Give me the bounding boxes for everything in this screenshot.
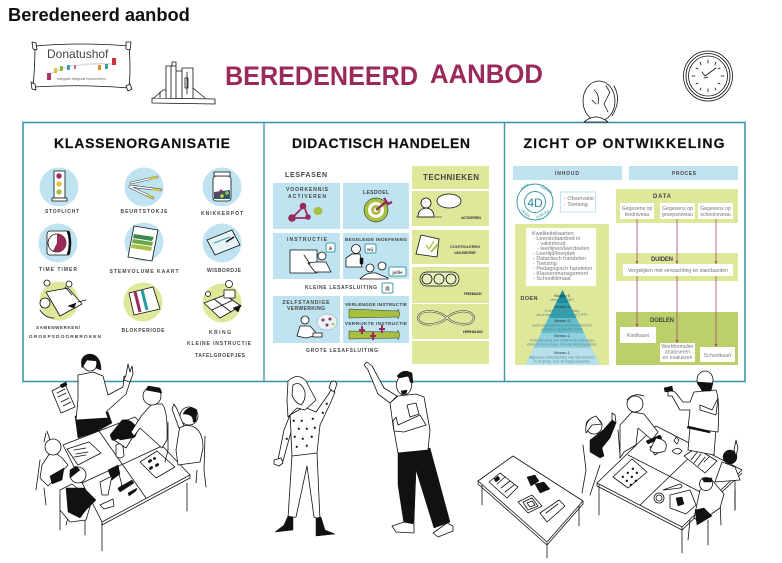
pyramid: kinderen in de groep, door de klasgroepsleider: [527, 342, 598, 346]
heading: lesfasen: LESFASEN: [285, 172, 327, 179]
card: controleren van begrip: VAN BEGRIP: [454, 250, 476, 255]
box: kwaliteitskaarten: - Schoolklimaat: [533, 276, 571, 282]
icon: spiral card: [518, 495, 542, 513]
icon: kring / tafelgroepjes: [202, 280, 242, 322]
block: doelen: Schoolkaart: [704, 353, 732, 359]
block: data: DATA: [653, 194, 672, 200]
pyramid: Extra ondersteuning met betrokkenheid: [532, 324, 592, 328]
block: data: Gegevens op: [700, 206, 731, 212]
card: feedback: [412, 267, 489, 303]
text: kleine lesafsluiting: KLEINE LESAFSLUITING: [305, 285, 377, 291]
label: GROEPSDOORBROKEN: [29, 334, 102, 340]
cell: voorkennis activeren: [273, 183, 340, 229]
cell: zelfstandige verwerking: ZELFSTANDIGE: [282, 300, 330, 306]
panel: zicht op ontwikkeling: [513, 135, 738, 365]
badge: 4D: 4D: [527, 196, 543, 210]
badge: jij: jij: [384, 286, 390, 292]
icon: stemvolume kaart: [124, 222, 164, 262]
cell: zelfstandige verwerking: VERWERKING: [287, 306, 325, 312]
block: duiden: Vergelijken met verwachting en standaarden: [628, 268, 728, 274]
card: herhaling: [412, 304, 489, 339]
label: SAMENWERKEN/: [36, 325, 81, 330]
badge: 4D: [517, 182, 554, 220]
pyramid: van intern begeleider (OPP): [541, 328, 583, 332]
label: STOPLICHT: [45, 209, 79, 215]
pyramid: Externe ondersteuning: [545, 309, 579, 313]
icon: beurtstokje: [124, 168, 164, 206]
pyramid: [525, 290, 600, 365]
box: kwaliteitskaarten: - Klassenmanagement: [533, 271, 589, 277]
cell: instructie: ik: [329, 246, 333, 251]
block: data: [616, 189, 738, 223]
pyramid: in de groep, door de klasgroepsleider: [534, 360, 591, 364]
table: [597, 426, 742, 553]
label: BEURTSTOKJE: [120, 209, 168, 215]
label: TAFELGROEPJES: [195, 353, 246, 359]
card: controleren van begrip: [412, 230, 489, 264]
block: data: Gegevens op: [662, 206, 693, 212]
panel: klassenorganisatie: [29, 135, 252, 359]
panel frame: [23, 122, 745, 382]
globe base over frame: [584, 117, 608, 122]
main title: [225, 59, 543, 91]
cell: instructie: [273, 233, 340, 279]
scene: teacher and group at table, left: [36, 354, 206, 551]
scene: side table with materials: [478, 456, 583, 558]
heading: klassenorganisatie: KLASSENORGANISATIE: [54, 135, 230, 151]
logo sign: Donatushof: [31, 42, 132, 91]
badge: 4D: DOEN: [520, 209, 531, 219]
card: activeren: [412, 191, 489, 226]
label: BLOKPERIODE: [122, 328, 165, 334]
main title: BEREDENEERD: [225, 61, 418, 91]
label: doen: DOEN: [520, 296, 538, 302]
cell: instructie: INSTRUCTIE: [287, 237, 328, 243]
main title: AANBOD: [430, 59, 543, 89]
heading: zicht op ontwikkeling: ZICHT OP ONTWIKKELING: [524, 135, 725, 151]
icon: samenwerken: [40, 280, 86, 320]
figure: child right: [172, 404, 206, 487]
cell: zelfstandige verwerking: [273, 296, 340, 343]
block: doelen: [616, 312, 738, 365]
cell: verlengde en verrijkte instructie: VERLENGDE INSTRUCTIE: [345, 302, 407, 307]
card: feedback: FEEDBACK: [464, 291, 482, 296]
icon: books on shelf: [152, 62, 215, 104]
box: kwaliteitskaarten: Kwaliteitskaarten:: [532, 231, 576, 237]
box: observatie toetsing: - Observatie: [564, 196, 594, 202]
header: technieken: TECHNIEKEN: [423, 173, 479, 182]
bar: inhoud: INHOUD: [555, 171, 579, 177]
card: activeren: ACTIVEREN: [461, 215, 481, 220]
cell: verlengde en verrijkte instructie: VERRIJKTE INSTRUCTIE: [345, 321, 407, 326]
cell: lesdoel: LESDOEL: [363, 190, 389, 196]
logo sign: Donatushof: Integrale Integraal Kindcentrum: [57, 77, 106, 81]
box: kwaliteitskaarten: - Toetsing: [533, 261, 557, 267]
figure: teacher: [52, 354, 133, 438]
box: kwaliteitskaarten: - vakinhoud: [537, 241, 565, 247]
box: kwaliteitskaarten: - leerlijnen/leerdoelen: [537, 246, 590, 252]
label: KNIKKERPOT: [201, 211, 243, 217]
bar: proces: [629, 166, 738, 180]
card: empty: [412, 341, 489, 364]
block: data: kindniveau: [625, 212, 650, 218]
block: doelen: analyseren: [665, 350, 690, 356]
label: WISBORDJE: [207, 268, 242, 274]
icon: black cards: [527, 475, 550, 493]
figure: child left bottom: [60, 466, 96, 535]
pyramid: Niveau 1: [554, 350, 571, 355]
figure: teacher with beard: [664, 371, 719, 455]
block: doelen: DOELEN: [650, 318, 674, 324]
pyramid: Ondersteuning voor individuele of groepjes: [530, 338, 595, 342]
icon: stoplicht: [40, 168, 78, 206]
box: observatie toetsing: [560, 192, 596, 212]
box: kwaliteitskaarten: - Pedagogisch handelen: [533, 266, 592, 272]
label: TIME TIMER: [39, 267, 77, 273]
pyramid: afvoerkanaal met expertise (OPP): [536, 313, 588, 317]
bar: inhoud: [513, 166, 622, 180]
icon: wall clock: [684, 51, 732, 101]
pyramid: Algemene ondersteuning voor alle kinderen: [529, 356, 595, 360]
bar: proces: PROCES: [672, 171, 697, 177]
box: observatie toetsing: - Toetsing: [564, 202, 588, 208]
page heading: Beredeneerd aanbod: [8, 4, 190, 25]
box: kwaliteitskaarten: - Leerstofaanbod in: [533, 236, 580, 242]
badge: jij: [382, 283, 393, 293]
figure: child right: [715, 440, 740, 510]
pyramid: Niveau 5: [554, 293, 571, 298]
block: duiden: [616, 253, 738, 281]
badge: 4D: DOELEN: [536, 209, 550, 220]
block: data: groepsniveau: [662, 212, 693, 218]
figure: child top: [131, 386, 168, 462]
block: doelen: en evalueren: [662, 355, 693, 361]
icon: wisbordje: [202, 224, 242, 262]
label: STEMVOLUME KAART: [110, 269, 178, 275]
cell: begeleide inoefening: wij: [366, 247, 373, 252]
figure: child left top: [36, 431, 68, 505]
cell: voorkennis activeren: ACTIVEREN: [288, 194, 326, 200]
badge: 4D: DATA: [520, 182, 530, 191]
table: [63, 417, 190, 551]
icon: open book: [489, 473, 518, 498]
block: doelen: Werkformulier: [661, 344, 694, 350]
cell: verlengde en verrijkte instructie: [343, 296, 409, 343]
arrows: data to doelen: [636, 219, 718, 347]
logo sign: Donatushof: Donatushof: [47, 47, 109, 61]
block: doelen: Kindkaart: [627, 333, 650, 339]
pyramid: Niveau 3: [554, 318, 571, 323]
scene: teacher and group at table, right: [582, 371, 742, 553]
cell: begeleide inoefening: jullie: [391, 270, 403, 275]
card: controleren van begrip: CONTROLEREN: [450, 244, 480, 249]
icon: blokperiode: [124, 282, 162, 322]
block: duiden: DUIDEN: [651, 257, 673, 263]
icon: knikkerpot: [202, 168, 242, 206]
pyramid: Niveau 2: [554, 333, 571, 338]
label: KRING: [209, 330, 231, 336]
cell: voorkennis activeren: VOORKENNIS: [286, 187, 329, 193]
box: kwaliteitskaarten: - Didactisch handelen: [533, 256, 586, 262]
heading: didactisch handelen: DIDACTISCH HANDELEN: [292, 135, 470, 151]
column: technieken: [412, 166, 489, 364]
panel: didactisch handelen: [273, 135, 489, 364]
figure: woman pointing: [274, 376, 337, 536]
box: kwaliteitskaarten: [526, 228, 596, 286]
cell: lesdoel: [343, 183, 409, 229]
icon: time timer: [38, 224, 78, 262]
label: KLEINE INSTRUCTIE: [187, 341, 252, 347]
cell: begeleide inoefening: BEGELEIDE INOEFENING: [345, 237, 407, 242]
block: data: schoolniveau: [700, 212, 731, 218]
figure: man pointing: [364, 362, 453, 537]
text: grote lesafsluiting: GROTE LESAFSLUITING: [306, 348, 378, 354]
block: data: Gegevens op: [622, 206, 653, 212]
box: kwaliteitskaarten: - Leertijd/leerplek: [533, 251, 575, 257]
pyramid: Verwijzing SBO: [550, 298, 574, 302]
icon: globe: [583, 81, 618, 122]
pyramid: Niveau 4: [554, 304, 571, 309]
figure: child bottom right: [688, 478, 724, 545]
figure: child pointing: [582, 413, 616, 495]
card: herhaling: HERHALING: [463, 329, 483, 334]
badge: 4D: DUIDEN: [540, 184, 554, 195]
header: technieken: [412, 166, 489, 189]
cell: begeleide inoefening: [343, 233, 409, 279]
figure: child with rolling pin: [618, 395, 666, 458]
block: doen: [515, 224, 609, 365]
icon: word card: [540, 500, 565, 522]
